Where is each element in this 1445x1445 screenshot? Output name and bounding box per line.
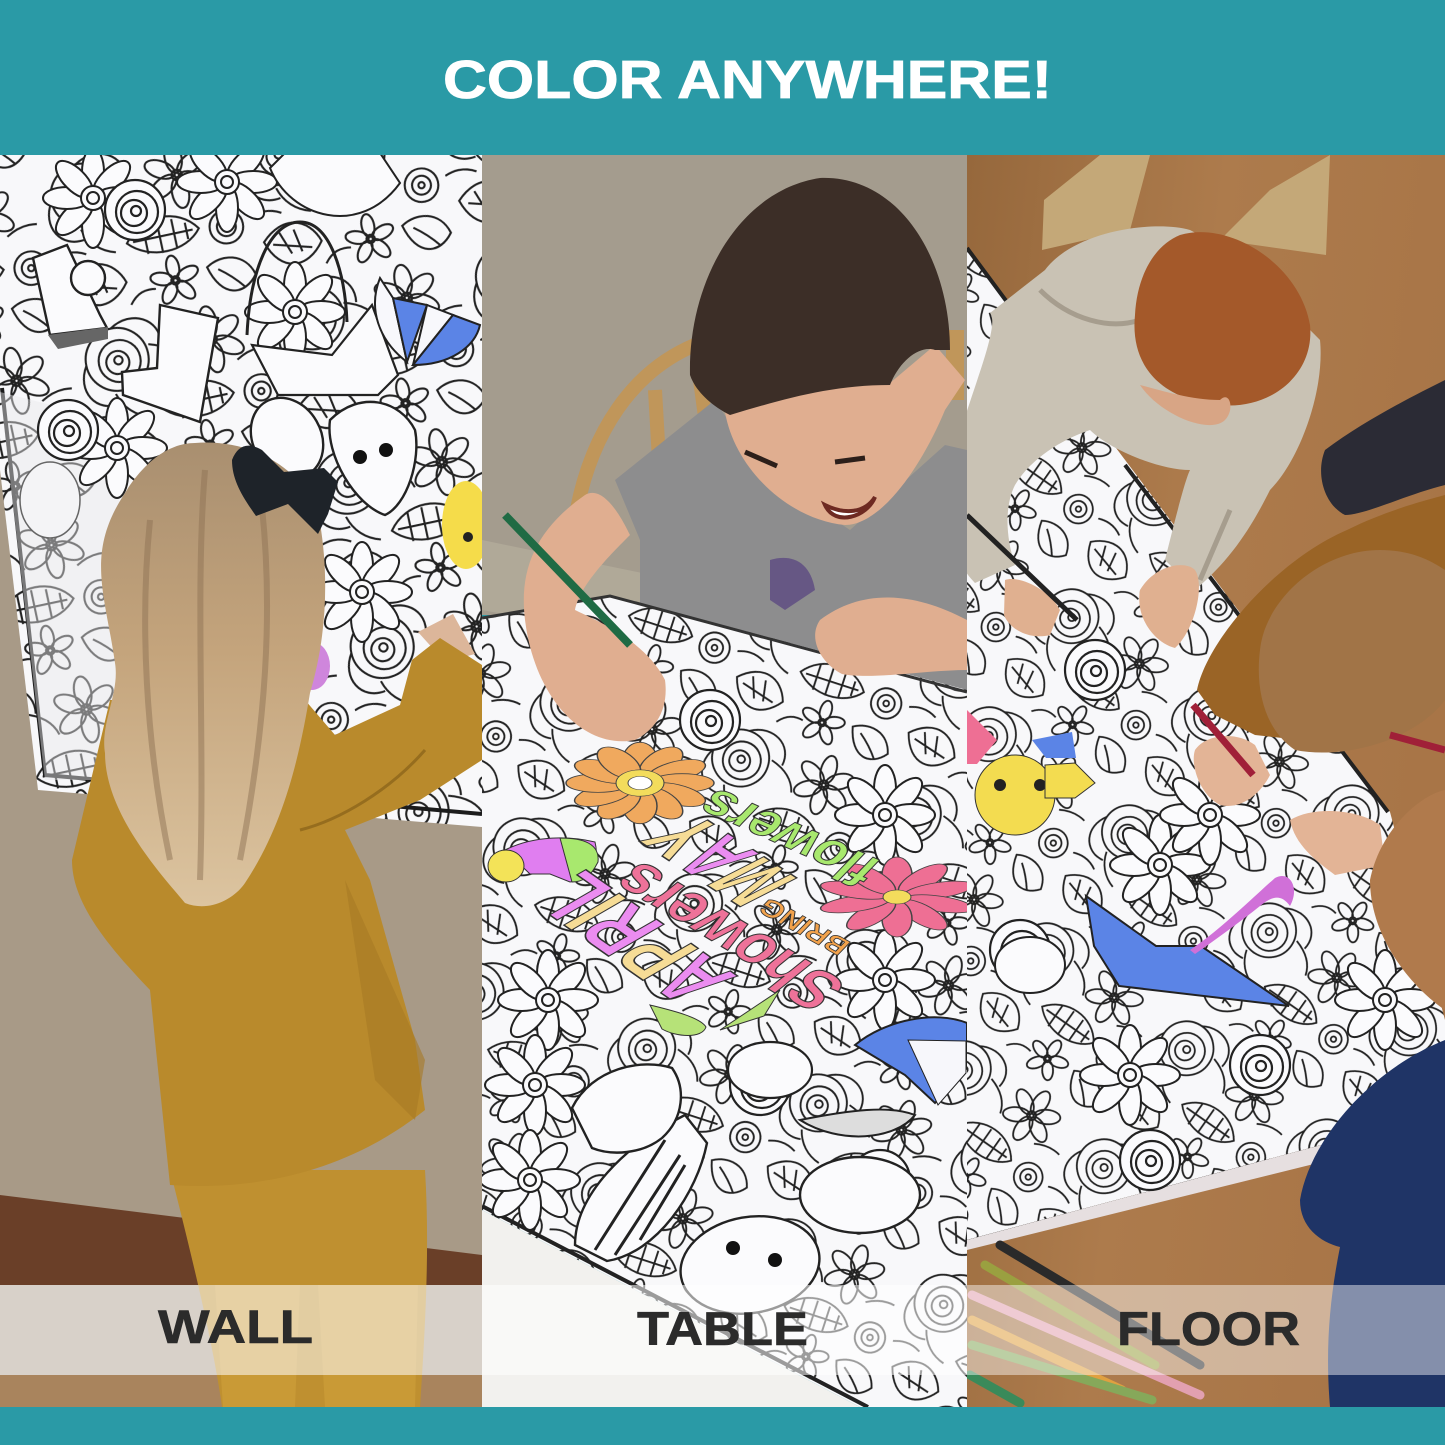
girl pants <box>170 1170 427 1407</box>
boy top: sweater and pants <box>946 155 1330 648</box>
pink flower <box>816 857 978 937</box>
boy arms <box>505 493 967 741</box>
label band: table <box>482 1285 967 1375</box>
orange flower <box>566 742 714 824</box>
footer band <box>0 1407 1445 1445</box>
april showers lettering: flowers <box>683 779 892 897</box>
panel: wall photo <box>0 132 490 1407</box>
wall poster <box>0 155 482 827</box>
poster doodles and colored details <box>20 132 490 690</box>
april showers lettering: Showers <box>594 851 860 1023</box>
april showers lettering: APRIL <box>512 859 756 1019</box>
label band: wall <box>0 1285 482 1375</box>
boy head <box>690 178 965 525</box>
girl hair <box>101 443 338 906</box>
panel: floor photo <box>946 155 1445 1407</box>
title: COLOR ANYWHERE! <box>443 50 1052 110</box>
boy shirt <box>615 400 967 700</box>
girl sweater <box>72 638 482 1186</box>
chair <box>570 330 964 506</box>
april showers lettering: BRING <box>752 893 856 961</box>
floor poster doodles and colors <box>967 640 1435 1190</box>
floor poster <box>967 250 1445 1240</box>
panel: table photo <box>480 155 978 1407</box>
shirt print <box>770 558 815 610</box>
boy lower right <box>1300 790 1445 1407</box>
table poster <box>482 595 967 1407</box>
markers <box>970 1245 1200 1403</box>
label: wall: WALL <box>158 1300 313 1353</box>
header band <box>0 0 1445 155</box>
table poster doodles <box>480 690 935 1324</box>
dark trousers <box>1321 380 1445 515</box>
label: floor: FLOOR <box>1117 1302 1300 1355</box>
label: table: TABLE <box>637 1302 808 1355</box>
boy right: jacket and head <box>1193 495 1445 875</box>
april showers lettering <box>488 742 978 1105</box>
april showers lettering: MAY <box>622 803 818 917</box>
girl hand <box>418 614 475 656</box>
label band: floor <box>967 1285 1445 1375</box>
